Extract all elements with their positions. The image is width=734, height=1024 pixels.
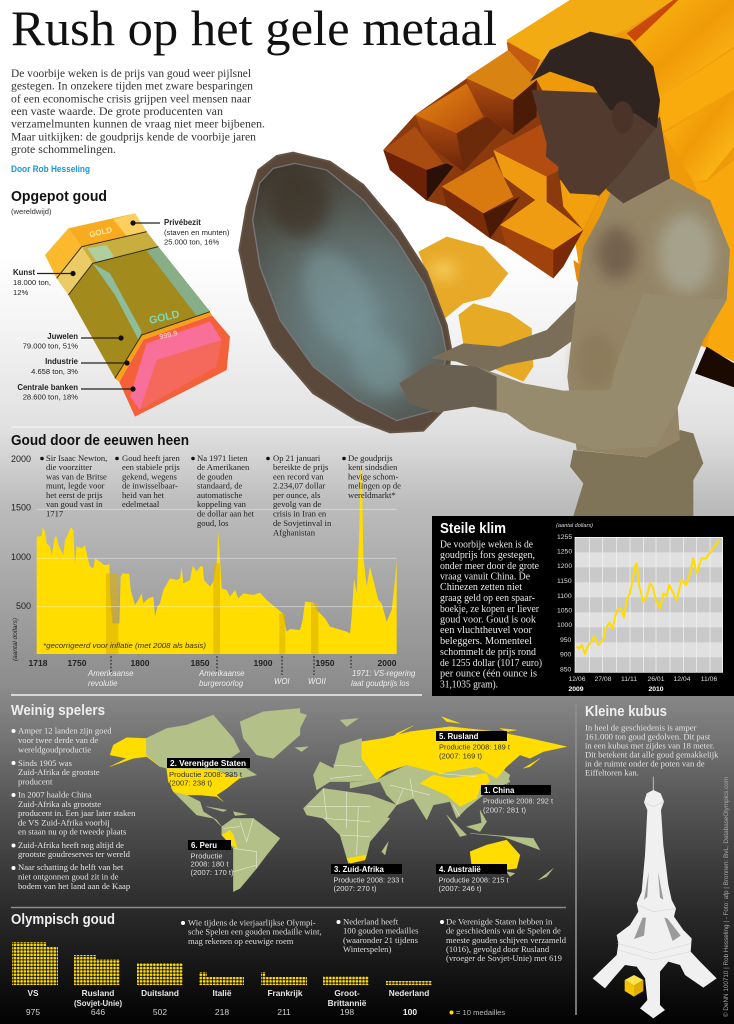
label: Verenigde Staten: (2007: 238 t)	[169, 778, 213, 788]
annotation: record: per ounce, als	[273, 490, 321, 500]
icon: gold cube	[625, 975, 643, 997]
Weinig spelers bullet list: Amper 12 landen zijn goed	[18, 726, 112, 736]
photo: gold bars, nuggets, pan and gold panner	[239, 0, 734, 516]
label: Verenigde Staten: Productie 2008: 235 t	[169, 770, 243, 779]
annotation: record	[266, 453, 332, 538]
bar: private holdings segment: GOLD	[88, 225, 113, 239]
label: Rusland: 5. Rusland	[439, 732, 479, 741]
shorts	[570, 430, 703, 516]
dots: Frankrijk	[261, 972, 307, 985]
Weinig spelers bullet list: producent in. Een jaar later staken	[18, 808, 136, 818]
annotation: record: bereikte de prijs	[273, 462, 329, 472]
intro text	[11, 66, 265, 156]
Weinig spelers bullet list: voor twee derde van de	[18, 735, 98, 745]
heading: Kleine kubus: Kleine kubus	[585, 704, 667, 720]
label: Industrie	[31, 357, 130, 376]
Weinig spelers bullet list: grootste goudreserves ter wereld	[18, 849, 131, 859]
world map: gold producers	[110, 708, 567, 893]
label: Peru	[188, 840, 234, 877]
label: Peru: 6. Peru	[191, 841, 217, 850]
chart y axis labels: 950	[560, 637, 572, 644]
medal counts: 211	[277, 1007, 291, 1017]
bar: art segment	[57, 232, 158, 295]
annotation: 1971: de Amerikanen	[197, 462, 250, 472]
dots: VS	[12, 942, 58, 985]
y axis labels: 2000	[11, 454, 31, 464]
Weinig spelers bullet list: producent	[18, 776, 53, 786]
Weinig spelers bullet list: bodem van het land aan de Kaap	[18, 881, 130, 891]
event labels: revolutie	[88, 679, 118, 688]
label: Privébezit	[130, 218, 230, 246]
area: gold price since 1718	[37, 470, 397, 654]
annotation: record: een record van	[273, 472, 324, 482]
Kleine kubus text: 161.000 ton goud gedolven. Dit past	[585, 732, 711, 742]
body text: een vluchtheuvel voor	[440, 625, 533, 636]
gold pan	[239, 153, 451, 432]
event labels: Amerikaanse	[198, 669, 245, 678]
Olympic text: column 2	[336, 916, 419, 954]
credits: © DeNN 100710 | Rob Hesseling | - Foto: afp | Bronnen: BvL, DatabaseOlympics.com	[722, 777, 730, 1017]
chart y axis labels: 1050	[557, 608, 572, 614]
annotation: Newton	[40, 453, 107, 518]
gold panner figure	[399, 32, 730, 516]
chart y axis labels: 1255	[557, 534, 572, 541]
y axis labels: 1500	[11, 502, 31, 512]
medal counts: 100	[403, 1007, 417, 1017]
event labels: WOI	[274, 677, 290, 686]
Weinig spelers bullet list: de VS Zuid-Afrika voorbij	[18, 818, 110, 828]
dots: Duitsland	[137, 963, 183, 985]
annotation: record: 2.234,07 dollar	[273, 480, 325, 490]
annotation: record: Afghanistan	[273, 528, 316, 538]
label: Australië	[436, 864, 509, 893]
label: Privébezit: 25.000 ton, 16%	[164, 238, 220, 246]
annotation: record: de Sovjetinval in	[273, 518, 332, 528]
label: Zuid-Afrika	[331, 864, 404, 893]
body text: goud voor. Goud is ook	[440, 614, 537, 626]
annotation: stable price: gekend, wegens	[122, 472, 178, 482]
label: Australië: Productie 2008: 215 t	[438, 876, 509, 884]
label: Industrie: Industrie	[45, 357, 79, 366]
gold bar breakdown	[45, 213, 230, 417]
subheading: wereldwijd: (wereldwijd)	[11, 207, 52, 216]
annotation: volatility: hevige schom-	[348, 472, 398, 482]
intro text: Maar uitkijken: de goudprijs kende de voorbije jaren	[11, 129, 256, 143]
x axis labels: 1950	[316, 658, 335, 668]
chart x axis labels: 26/01	[647, 676, 665, 683]
label: China	[481, 785, 554, 814]
country labels: Frankrijk	[267, 988, 303, 998]
x axis labels: 1850	[191, 658, 210, 668]
annotation: stable price: een stabiele prijs	[122, 462, 180, 472]
Weinig spelers bullet list: In 2007 haalde China	[18, 790, 92, 800]
body text: schommelt de prijs rond	[440, 647, 537, 658]
Eiffel tower with gold cube	[593, 777, 717, 1018]
Olympic text: column 1: sche Spelen een gouden medaille wint,	[188, 926, 322, 936]
country labels: Brittannië	[328, 998, 367, 1008]
label: Zuid-Afrika: (2007: 270 t)	[334, 884, 377, 893]
annotation: 1971: de gouden	[197, 472, 233, 482]
body text: onder meer door de grote	[440, 561, 539, 572]
Weinig spelers bullet list: en staan nu op de tweede plaats	[18, 826, 127, 836]
intro text: een vaste waarde. De grote producenten van	[11, 104, 223, 118]
country labels: Italië	[213, 988, 232, 998]
map: Americas	[110, 708, 300, 892]
label: China: 1. China	[484, 786, 515, 795]
chart y axis labels: 850	[560, 666, 572, 674]
Weinig spelers bullet list	[12, 726, 136, 891]
label: Peru: 2008: 180 t	[190, 860, 229, 868]
chart x axis labels: 11/11	[621, 676, 637, 683]
Kleine kubus text	[585, 722, 719, 778]
chart y axis labels: 900	[560, 652, 572, 658]
annotation: volatility: kent sindsdien	[348, 462, 398, 472]
bar: industry segment	[115, 312, 212, 382]
annotation: volatility: wereldmarkt*	[348, 490, 396, 500]
near arm	[399, 293, 727, 450]
medal counts	[26, 1007, 417, 1017]
Olympic text: column 3: (vroeger de Sovjet-Unie) met 619	[446, 953, 562, 963]
body text: vraag vanuit China. De	[440, 572, 530, 582]
medal counts: 218	[215, 1007, 229, 1017]
label: Verenigde Staten	[167, 758, 250, 788]
annotation: 1971: standaard, de	[197, 480, 243, 490]
label: China: (2007: 281 t)	[483, 806, 527, 814]
label: Industrie: 4.658 ton, 3%	[31, 367, 78, 376]
Olympic text: column 3: (1016), gevolgd door Rusland	[446, 944, 550, 954]
Olympic text: column 3: De Verenigde Staten hebben in	[446, 916, 553, 926]
intro text: grote schommelingen.	[11, 142, 116, 156]
body text: beleggers. Momenteel	[440, 636, 532, 647]
label: Privébezit: Privébezit	[164, 218, 201, 227]
Olympic text: column 3: de geschiedenis van de Spelen de	[446, 926, 561, 936]
annotation: Newton: munt, legde voor	[46, 480, 105, 490]
label: Centrale banken	[17, 383, 136, 402]
x axis labels: 2000	[378, 658, 397, 668]
chart y axis labels: (aantal dollars)	[556, 523, 593, 529]
history price chart	[11, 453, 416, 688]
intro text: gestegen. In onzekere tijden met zware besparingen	[11, 79, 253, 93]
event labels: Amerikaanse	[87, 669, 134, 678]
title: Rush op het gele metaal	[11, 0, 497, 56]
event labels: laat goudprijs los	[351, 679, 410, 688]
country labels: (Sovjet-Unie)	[74, 999, 122, 1008]
label: Australië: (2007: 246 t)	[438, 884, 482, 893]
medal counts: 646	[91, 1007, 105, 1017]
label: Kunst: 18.000 ton,	[13, 278, 51, 287]
neck	[603, 117, 670, 203]
annotation: record: crisis in Iran en	[273, 508, 327, 518]
Kleine kubus text: Dit betekent dat alle goud gemakkelijk	[585, 750, 719, 760]
y axis labels: 500	[16, 601, 31, 611]
annotation: stable price: edelmetaal	[122, 499, 160, 509]
body text: per ounce (één ounce is	[440, 668, 537, 680]
x axis labels	[29, 658, 397, 668]
annotation: 1971: Na 1971 lieten	[197, 453, 248, 463]
chart y axis labels: 1000	[557, 622, 572, 629]
line chart: price 2009-2010	[556, 523, 723, 693]
label: Centrale banken: Centrale banken	[17, 383, 78, 392]
torso	[567, 177, 730, 457]
heading: Goud door de eeuwen heen: Goud door de eeuwen heen	[11, 433, 189, 449]
annotation: volatility	[342, 453, 401, 500]
chart y axis labels: 1150	[557, 578, 572, 585]
Weinig spelers bullet list: Naar schatting de helft van het	[18, 862, 124, 872]
Weinig spelers bullet list: wereldgoudproductie	[18, 744, 91, 754]
country labels: Groot-	[334, 988, 360, 998]
Olympic text: column 1: mag rekenen op eeuwige roem	[188, 936, 294, 946]
x axis labels: 1750	[68, 658, 87, 668]
event ticks	[111, 656, 351, 675]
heading: Steile klim	[440, 521, 506, 537]
Olympic text: column 2: Nederland heeft	[343, 916, 399, 926]
label: Kunst: 12%	[13, 288, 28, 297]
Weinig spelers bullet list: Zuid-Afrika de grootste	[18, 767, 100, 777]
label: Juwelen: 79.000 ton, 51%	[23, 342, 78, 350]
event labels	[87, 669, 416, 688]
Weinig spelers bullet list: niet ontgonnen goud zit in de	[18, 872, 119, 882]
annotation: stable price: heid van het	[122, 490, 165, 500]
far arm	[430, 297, 580, 373]
dots: Rusland	[74, 955, 120, 985]
annotation: 1971: de dollar aan het	[197, 508, 255, 518]
chart x axis labels: 11/06	[701, 676, 717, 683]
label: Kunst	[13, 268, 76, 297]
chart y axis labels	[556, 523, 593, 674]
body text: graag geld op een spaar-	[440, 593, 536, 604]
annotation: Newton: was van de Britse	[46, 472, 107, 482]
country labels: Duitsland	[141, 988, 179, 998]
heading: Olympisch goud: Olympisch goud	[11, 912, 115, 928]
body text: 31,1035 gram).	[440, 680, 498, 690]
chart x axis labels: 27/08	[594, 676, 612, 683]
medal counts: 502	[153, 1007, 167, 1017]
bar: jewellery segment	[68, 247, 210, 378]
annotation: record: Op 21 januari	[273, 453, 321, 463]
bar: private holdings segment	[45, 213, 147, 278]
Olympic text: column 1	[181, 918, 322, 946]
panel: Steile klim	[432, 516, 734, 696]
gold bar labels	[13, 218, 230, 402]
chart x axis labels: 12/06	[568, 676, 586, 683]
chart y axis labels: 1100	[557, 593, 572, 600]
dots: Groot-Brittannië	[323, 976, 369, 985]
label: Rusland	[436, 731, 511, 760]
gold nuggets	[418, 237, 533, 382]
event labels: burgeroorlog	[199, 679, 244, 688]
annotation: Newton: van goud vast in	[46, 499, 103, 509]
map: Eurasia, Africa, Oceania	[290, 710, 567, 880]
dots: Nederland	[386, 981, 432, 985]
y axis labels: (aantal dollars)	[12, 618, 19, 661]
Kleine kubus text: Eiffeltoren kan.	[585, 768, 639, 778]
event labels: 1971: VS-regering	[352, 669, 416, 678]
body text: de 1255 dollar (1017 euro)	[440, 658, 542, 669]
label: China: Productie 2008: 292 t	[483, 796, 554, 806]
Weinig spelers bullet list: Zuid-Afrika als grootste	[18, 799, 101, 809]
Kleine kubus text: in een kubus met zijdes van 18 meter.	[585, 740, 714, 750]
annotation: Newton: 1717	[46, 508, 64, 518]
label: Peru: (2007: 170 t)	[190, 868, 234, 877]
country labels: Nederland	[389, 988, 429, 998]
body text: Chinezen zetten niet	[440, 582, 522, 593]
Olympic text: column 3: meeste gouden schijven verzameld	[446, 935, 567, 945]
Weinig spelers bullet list: Zuid-Afrika heeft nog altijd de	[18, 840, 124, 850]
x axis labels: 1800	[131, 658, 150, 668]
Olympic text: column 2: (waaronder 21 tijdens	[343, 935, 419, 945]
label: Zuid-Afrika: Productie 2008: 233 t	[334, 876, 404, 884]
annotation: record: gevolg van de	[273, 499, 321, 509]
bar: jewellery segment: GOLD	[148, 308, 181, 327]
Olympic text: column 2: 100 gouden medailles	[343, 926, 419, 936]
byline: Door Rob Hesseling	[11, 164, 90, 174]
intro text: De voorbije weken is de prijs van goud weer pijlsnel	[11, 66, 252, 80]
Weinig spelers bullet list: Sinds 1905 was	[18, 758, 73, 768]
bar: central bank segment: 999.9	[158, 328, 178, 341]
annotation: 1971	[191, 453, 255, 528]
chart y axis labels: 1250	[557, 548, 572, 556]
chart x axis labels	[568, 676, 717, 693]
label: Juwelen	[23, 332, 124, 350]
Kleine kubus text: In heel de geschiedenis is amper	[585, 722, 697, 732]
Olympic medal dot chart	[12, 942, 505, 1017]
label: Privébezit: (staven en munten)	[164, 228, 230, 237]
footnote: *gecorrigeerd voor inflatie (met 2008 als basis)	[43, 641, 206, 650]
chart x axis labels: 12/04	[673, 676, 691, 683]
Kleine kubus text: in de ruimte onder de poten van de	[585, 758, 705, 768]
Olympic text: column 1: Wie tijdens de vierjaarlijkse Olympi-	[188, 918, 316, 928]
body text	[440, 540, 542, 690]
intro text: of een economische crisis grijpen veel mensen naar	[11, 91, 251, 105]
legend: = 10 medailles	[456, 1008, 505, 1017]
annotation: Newton: het eerst de prijs	[46, 490, 103, 500]
country labels: Rusland	[82, 988, 114, 998]
label: Verenigde Staten: 2. Verenigde Staten	[170, 759, 246, 768]
Olympic text: column 2: Winterspelen)	[343, 944, 391, 954]
label: Australië: 4. Australië	[439, 865, 481, 874]
heading: Opgepot goud: Opgepot goud	[11, 189, 107, 205]
label: Juwelen: Juwelen	[47, 332, 78, 341]
heading: Weinig spelers: Weinig spelers	[11, 703, 105, 719]
intro text: verzamelmunten kunnen de vraag niet meer bijbenen.	[11, 117, 265, 131]
medal counts: 198	[340, 1007, 354, 1017]
event labels: WOII	[308, 677, 327, 686]
chart y axis labels: 1200	[557, 563, 572, 570]
annotation: volatility: De goudprijs	[348, 453, 393, 463]
x axis labels: 1900	[254, 658, 273, 668]
annotation: volatility: melingen op de	[348, 480, 401, 490]
medal counts: 975	[26, 1007, 40, 1017]
x axis labels: 1718	[29, 658, 48, 668]
annotation: Newton: die voorzitter	[46, 462, 92, 472]
annotation: 1971: koppeling van	[197, 499, 247, 509]
head	[532, 90, 658, 195]
y axis labels: 1000	[11, 552, 31, 562]
label: Peru: Productie	[190, 852, 223, 860]
y axis labels	[11, 454, 31, 661]
chart x axis labels: 2010	[648, 686, 664, 693]
country labels: VS	[27, 988, 39, 998]
gold bars	[383, 0, 734, 387]
Olympic text: column 3	[440, 916, 567, 963]
body text: De voorbije weken is de	[440, 540, 533, 550]
label: Zuid-Afrika: 3. Zuid-Afrika	[334, 865, 384, 874]
bar: central bank segment	[119, 315, 230, 417]
country labels	[27, 988, 429, 1008]
label: Kunst: Kunst	[13, 268, 35, 277]
label: Rusland: (2007: 169 t)	[439, 752, 483, 760]
body text: goudprijs fors gestegen,	[440, 550, 535, 561]
annotation: stable price	[115, 453, 180, 509]
annotation: 1971: goud, los	[197, 518, 229, 528]
label: Rusland: Productie 2008: 189 t	[439, 742, 511, 752]
label: Centrale banken: 28.600 ton, 18%	[23, 392, 78, 402]
annotation: 1971: automatische	[197, 490, 243, 500]
dots: Italië	[199, 972, 244, 985]
body text: boekje, ze kopen er liever	[440, 604, 539, 615]
annotation: Newton: Sir Isaac Newton,	[46, 453, 107, 463]
annotation: stable price: Goud heeft jaren	[122, 453, 180, 463]
chart x axis labels: 2009	[568, 686, 584, 693]
annotation: stable price: de inwisselbaar-	[122, 480, 178, 490]
